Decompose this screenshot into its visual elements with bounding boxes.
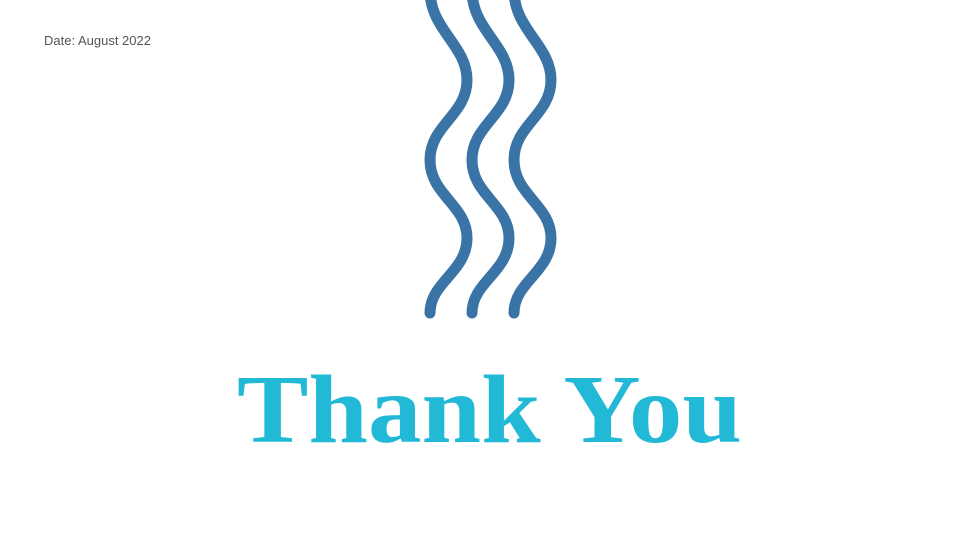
title: Thank You (237, 356, 742, 464)
date text: Date: August 2022 (44, 33, 151, 48)
icon: three wavy lines (430, 0, 551, 313)
